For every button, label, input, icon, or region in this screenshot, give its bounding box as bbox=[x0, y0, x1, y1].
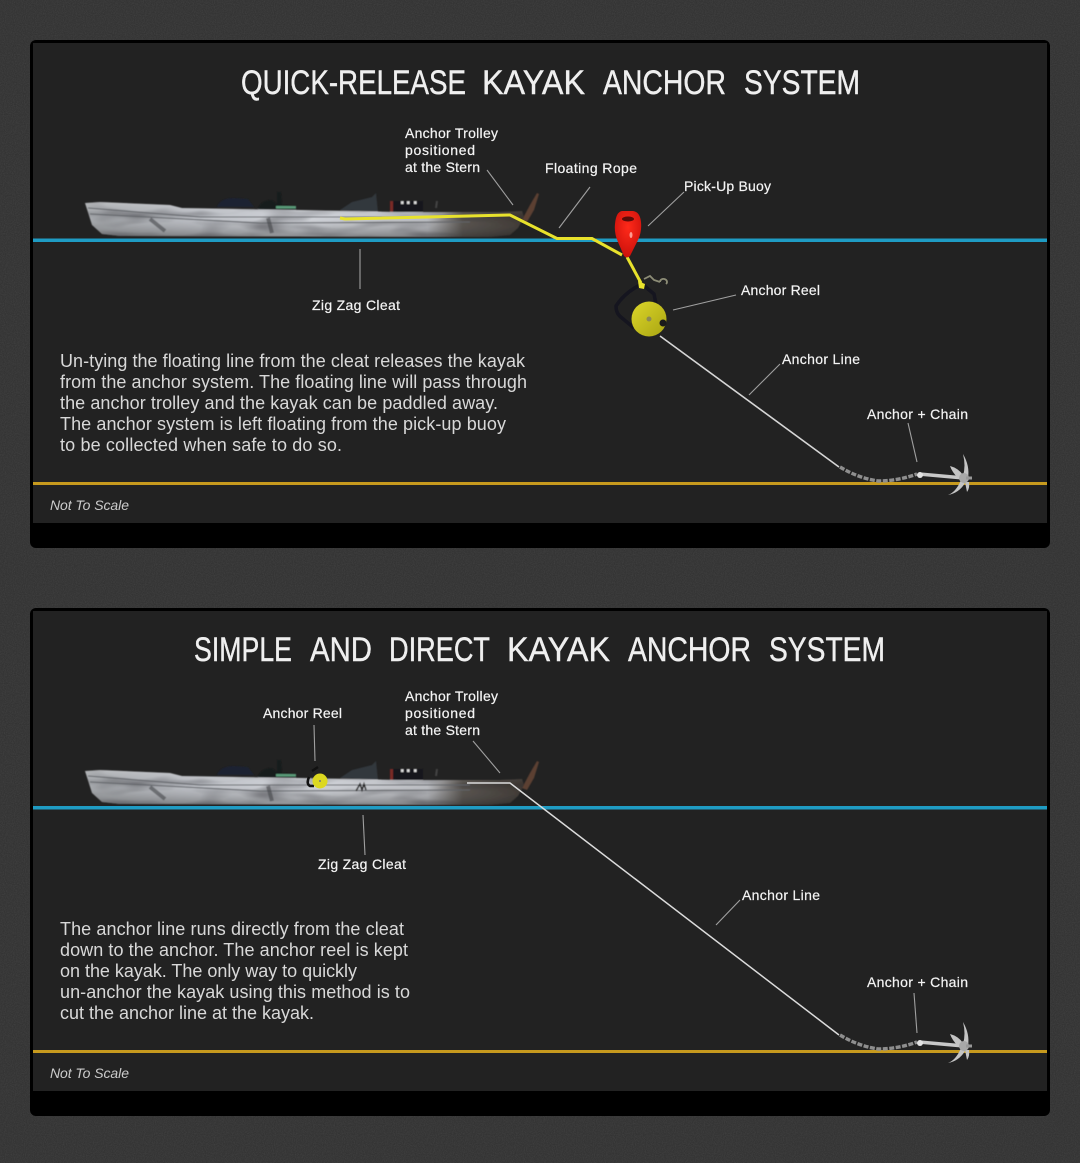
title: quick-release: ANCHOR bbox=[603, 64, 726, 102]
anchor reel bbox=[616, 276, 667, 336]
label: zig zag cleat bbox=[312, 249, 400, 313]
kayak illustration bbox=[85, 192, 539, 238]
description text: down to the anchor. The anchor reel is kept bbox=[60, 940, 408, 960]
label: floating rope: Floating Rope bbox=[545, 160, 637, 176]
label: anchor reel bbox=[673, 282, 820, 310]
description text: The anchor system is left floating from the pick-up buoy bbox=[60, 414, 506, 434]
label: anchor reel bbox=[263, 705, 342, 761]
kayak illustration bbox=[85, 760, 539, 806]
title: simple and direct: KAYAK bbox=[507, 631, 610, 669]
anchor line bbox=[660, 336, 839, 467]
label: anchor trolley: at the Stern bbox=[405, 159, 480, 175]
label: anchor trolley: Anchor Trolley bbox=[405, 125, 498, 141]
description text: from the anchor system. The floating line will pass through bbox=[60, 372, 527, 392]
description text: Un-tying the floating line from the cleat releases the kayak bbox=[60, 351, 526, 371]
description text bbox=[60, 351, 527, 455]
water line bbox=[33, 806, 1047, 810]
title: quick-release: QUICK-RELEASE bbox=[241, 64, 466, 102]
description text: The anchor line runs directly from the cleat bbox=[60, 919, 404, 939]
anchor and chain bbox=[840, 454, 972, 495]
pick-up buoy bbox=[615, 211, 641, 258]
description text: to be collected when safe to do so. bbox=[60, 435, 342, 455]
water line bbox=[33, 238, 1047, 242]
label: zig zag cleat: Zig Zag Cleat bbox=[318, 856, 406, 872]
label: anchor line bbox=[716, 887, 820, 925]
label: anchor line: Anchor Line bbox=[742, 887, 820, 903]
description text bbox=[60, 919, 410, 1023]
title: simple and direct: SIMPLE bbox=[194, 631, 292, 669]
title: simple and direct: ANCHOR bbox=[628, 631, 751, 669]
description text: the anchor trolley and the kayak can be paddled away. bbox=[60, 393, 498, 413]
seabed line bbox=[33, 482, 1047, 485]
label: anchor and chain: Anchor + Chain bbox=[867, 406, 968, 422]
anchor reel on kayak bbox=[308, 767, 328, 788]
panel: quick-release anchor system bbox=[30, 40, 1050, 548]
label: zig zag cleat: Zig Zag Cleat bbox=[312, 297, 400, 313]
title: simple and direct: SYSTEM bbox=[769, 631, 885, 669]
title: quick-release: SYSTEM bbox=[744, 64, 860, 102]
label: anchor and chain: Anchor + Chain bbox=[867, 974, 968, 990]
label: pick-up buoy: Pick-Up Buoy bbox=[684, 178, 771, 194]
floating rope bbox=[340, 215, 641, 283]
title: simple and direct: DIRECT bbox=[389, 631, 490, 669]
label: anchor trolley bbox=[405, 125, 513, 205]
label: anchor and chain bbox=[867, 974, 968, 1033]
label: anchor trolley: positioned bbox=[405, 705, 475, 721]
description text: un-anchor the kayak using this method is to bbox=[60, 982, 410, 1002]
description text: on the kayak. The only way to quickly bbox=[60, 961, 357, 981]
label: anchor trolley bbox=[405, 688, 500, 773]
panel: simple and direct anchor system bbox=[30, 608, 1050, 1116]
title: simple and direct: AND bbox=[310, 631, 372, 669]
seabed line bbox=[33, 1050, 1047, 1053]
title: quick-release bbox=[241, 64, 860, 102]
label: anchor line: Anchor Line bbox=[782, 351, 860, 367]
label: anchor trolley: at the Stern bbox=[405, 722, 480, 738]
label: anchor trolley: positioned bbox=[405, 142, 475, 158]
title: simple and direct bbox=[194, 631, 885, 669]
label: zig zag cleat bbox=[318, 815, 406, 872]
label: anchor reel: Anchor Reel bbox=[263, 705, 342, 721]
label: anchor trolley: Anchor Trolley bbox=[405, 688, 498, 704]
label: anchor and chain bbox=[867, 406, 968, 462]
label: pick-up buoy bbox=[648, 178, 771, 226]
label: floating rope bbox=[545, 160, 637, 228]
anchor and chain bbox=[840, 1022, 972, 1063]
not to scale note: Not To Scale bbox=[50, 1065, 129, 1081]
label: anchor reel: Anchor Reel bbox=[741, 282, 820, 298]
title: quick-release: KAYAK bbox=[482, 64, 585, 102]
anchor line bbox=[467, 783, 839, 1035]
not to scale note: Not To Scale bbox=[50, 497, 129, 513]
description text: cut the anchor line at the kayak. bbox=[60, 1003, 314, 1023]
label: anchor line bbox=[749, 351, 860, 395]
